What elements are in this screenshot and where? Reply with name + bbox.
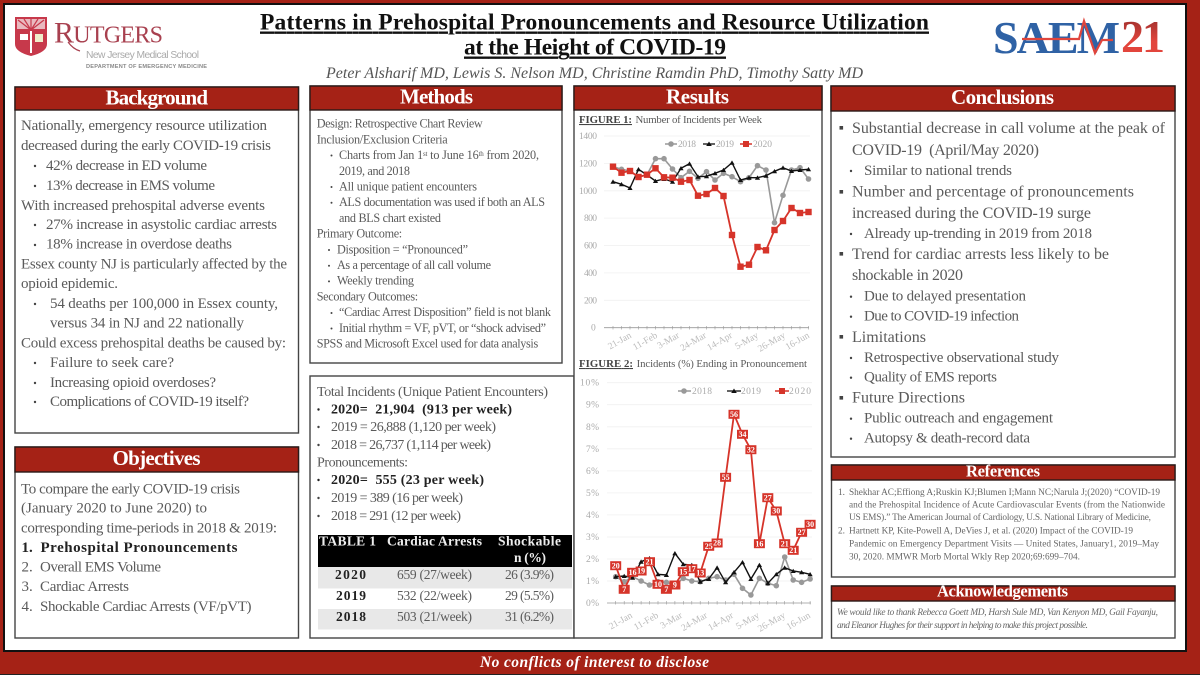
methods text: SPSS and Microsoft Excel used for data analysis [317, 336, 538, 350]
conclusions text: shockable in 2020 [852, 267, 963, 284]
methods text: 2019, and 2018 [339, 164, 410, 178]
incident totals: 2018 = 26,737 (1,114 per week) [331, 438, 491, 453]
background text: versus 34 in NJ and 22 nationally [50, 316, 244, 332]
authors: Peter Alsharif MD, Lewis S. Nelson MD, Christine Ramdin PhD, Timothy Satty MD [325, 65, 863, 82]
conclusions text: Limitations [852, 329, 926, 346]
table 1: cardiac arrests: 2019 [336, 588, 366, 603]
objectives text: 4. [22, 599, 33, 615]
conclusions text: Autopsy & death-record data [864, 431, 1030, 447]
series 2020 with data labels: 9 [673, 581, 677, 590]
table 1: cardiac arrests: 532 (22/week) [397, 588, 472, 603]
objectives text: 1. [22, 540, 33, 556]
legend: 2020 [753, 140, 772, 150]
background text: With increased prehospital adverse events [21, 198, 265, 214]
references list: Shekhar AC;Effiong A;Ruskin KJ;Blumen I;Mann NC;Narula J;(2020) “COVID-19 [849, 487, 1160, 498]
title: Patterns in Prehospital Pronouncements and Resource Utilization [260, 10, 929, 36]
incident totals: Pronouncements: [317, 456, 408, 471]
chart: percent of incidents ending in pronouncement: 24-Mar [680, 611, 710, 634]
chart: percent of incidents ending in pronouncement: 10% [580, 379, 599, 389]
background text: 42% decrease in ED volume [46, 158, 207, 174]
acknowledgements text [837, 608, 1158, 631]
methods text: Secondary Outcomes: [317, 289, 418, 303]
chart: incidents per week: 24-Mar [679, 331, 709, 354]
references list: 2. [838, 526, 845, 536]
acknowledgements text: We would like to thank Rebecca Goett MD, Harsh Sule MD, Van Kenyon MD, Gail Fayanju, [837, 608, 1158, 618]
methods text: Primary Outcome: [317, 227, 402, 241]
methods text: to June 16 [427, 148, 479, 162]
table 1: cardiac arrests: 31 (6.2%) [505, 609, 554, 624]
background text: decreased during the early COVID-19 crisis [21, 138, 271, 154]
chart: percent of incidents ending in pronouncement: 3% [586, 533, 599, 543]
chart: incidents per week: 800 [584, 214, 597, 224]
conclusions text: Similar to national trends [864, 163, 1012, 179]
series 2020 with data labels: 7 [664, 585, 668, 594]
methods text: As a percentage of all call volume [337, 258, 491, 272]
series 2020 with data labels: 15 [679, 567, 687, 576]
background text: Failure to seek care? [50, 355, 174, 371]
series 2020 with data labels: 21 [646, 557, 654, 566]
table 1: cardiac arrests: 659 (27/week) [397, 567, 472, 582]
series 2020 with data labels: 28 [713, 539, 721, 548]
legend: 2018 [692, 387, 712, 397]
chart: incidents per week: 1400 [579, 132, 597, 142]
legend: 2018 [678, 140, 696, 150]
chart: incidents per week: 11-Feb [631, 331, 660, 353]
chart: percent of incidents ending in pronouncement: 0% [586, 599, 599, 609]
chart: incidents per week: 200 [584, 296, 597, 306]
series 2020 with data labels: 21 [781, 539, 789, 548]
table 1: cardiac arrests: 2018 [336, 609, 366, 624]
legend: 2019 [741, 387, 761, 397]
chart: incidents per week: 5-May [734, 331, 761, 352]
series 2020 with data labels: 32 [747, 445, 755, 454]
panel: references [832, 462, 1175, 577]
figure 1 caption: FIGURE 1: [579, 114, 632, 126]
series 2020 with data labels: 30 [806, 520, 814, 529]
series 2018 [616, 557, 810, 595]
series 2020 with data labels: 19 [637, 567, 645, 576]
references list: US EMS).” The American Journal of Cardiology, U.S. National Library of Medicine, [849, 512, 1151, 523]
chart: incidents per week: 16-Jun [784, 331, 812, 353]
references list: 1. [838, 488, 845, 498]
heading: results: Results [666, 84, 729, 108]
panel: objectives [15, 446, 298, 638]
incident totals: Total Incidents (Unique Patient Encounters) [317, 385, 548, 400]
chart: incidents per week: 1000 [579, 187, 597, 197]
chart: percent of incidents ending in pronouncement: 21-Jan [608, 611, 635, 632]
series 2020 with data labels: 13 [696, 569, 704, 578]
series 2020 with data labels: 10 [654, 580, 662, 589]
heading: objectives: Objectives [112, 446, 200, 470]
chart: percent of incidents ending in pronouncement: 8% [586, 423, 599, 433]
chart: percent of incidents ending in pronouncement: 3-Mar [659, 611, 685, 631]
panel: methods [310, 84, 562, 363]
objectives text: 2. [22, 560, 33, 576]
references list: 30, 2020. MMWR Morb Mortal Wkly Rep 2020;69:699–704. [849, 553, 1080, 563]
title: at the Height of COVID-19 [464, 34, 726, 60]
conclusions text: Retrospective observational study [864, 350, 1060, 366]
chart: percent of incidents ending in pronouncement: 4% [586, 511, 599, 521]
background text: Could excess prehospital deaths be caused by: [21, 336, 286, 352]
series 2020 with data labels: 21 [789, 546, 797, 555]
figure 2 caption: FIGURE 2: [579, 358, 633, 370]
objectives text: To compare the early COVID-19 crisis [21, 481, 240, 497]
panel: conclusions [831, 85, 1175, 457]
panel: incident totals and table [310, 376, 574, 638]
series 2020 with data labels: 7 [622, 585, 626, 594]
background text: Increasing opioid overdoses? [50, 375, 216, 391]
methods text: Charts from Jan 1 [339, 148, 423, 162]
conclusions text: Trend for cardiac arrests less likely to be [852, 246, 1109, 263]
methods text: Disposition = “Pronounced” [337, 242, 468, 256]
table 1: cardiac arrests: Shockable [498, 534, 561, 549]
chart: percent of incidents ending in pronouncement: 5% [586, 489, 599, 499]
legend [678, 387, 811, 397]
series 2019 [613, 163, 808, 188]
logo: SAEM21: 21 [1121, 11, 1165, 62]
series 2020 with data labels: 56 [730, 410, 738, 419]
legend: 2019 [716, 140, 734, 150]
background text: Essex county NJ is particularly affected by the [21, 256, 287, 272]
table 1: cardiac arrests: 29 (5.5%) [505, 588, 554, 603]
heading: conclusions: Conclusions [951, 85, 1054, 109]
conclusions text: COVID-19 (April/May 2020) [852, 142, 1039, 159]
conclusions text: Public outreach and engagement [864, 411, 1054, 427]
table 1: cardiac arrests: 503 (21/week) [397, 609, 472, 624]
background text: opioid epidemic. [21, 276, 118, 292]
methods text: and BLS chart existed [339, 211, 441, 225]
incident totals [317, 385, 548, 524]
methods text: Design: Retrospective Chart Review [317, 117, 483, 131]
background text: 18% increase in overdose deaths [46, 236, 232, 252]
conclusions text: Future Directions [852, 390, 965, 407]
series 2020 with data labels [612, 410, 814, 594]
background text: 54 deaths per 100,000 in Essex county, [50, 296, 278, 312]
heading: acknowledgements: Acknowledgements [937, 582, 1069, 601]
objectives text: Prehospital Pronouncements [40, 540, 238, 556]
methods text: Inclusion/Exclusion Criteria [317, 132, 448, 146]
background text [21, 118, 287, 410]
heading: references: References [966, 462, 1041, 481]
chart: percent of incidents ending in pronouncement: 2% [586, 555, 599, 565]
methods text: Weekly trending [337, 274, 414, 288]
series 2020 with data labels: 55 [722, 473, 730, 482]
references list [838, 487, 1165, 563]
chart: percent of incidents ending in pronouncement: 11-Feb [632, 611, 661, 633]
background text: 13% decrease in EMS volume [46, 178, 215, 194]
methods text: ALS documentation was used if both an ALS [339, 195, 545, 209]
background text: 27% increase in asystolic cardiac arrests [46, 217, 277, 233]
incident totals: 2018 = 291 (12 per week) [331, 509, 461, 524]
acknowledgements text: and Eleanor Hughes for their support in helping to make this project possible. [837, 620, 1088, 631]
series 2020 with data labels: 30 [772, 507, 780, 516]
chart: incidents per week: 1200 [579, 159, 597, 169]
series 2020 with data labels: 27 [798, 528, 806, 537]
chart: percent of incidents ending in pronouncement: 26-May [756, 611, 788, 635]
methods text: st [423, 150, 428, 158]
heading: methods: Methods [400, 84, 473, 108]
references list: Hartnett KP, Kite-Powell A, DeVies J, et al. (2020) Impact of the COVID-19 [849, 525, 1133, 536]
table 1: cardiac arrests: 26 (3.9%) [505, 567, 554, 582]
conclusions text: increased during the COVID-19 surge [852, 205, 1091, 222]
chart: incidents per week: 3-Mar [656, 331, 682, 351]
series 2020 with data labels: 27 [764, 493, 772, 502]
logo: Rutgers New Jersey Medical School: RUTGERS [54, 16, 163, 50]
heading: background: Background [106, 85, 208, 109]
table 1: cardiac arrests: 2020 [335, 567, 366, 582]
chart: percent of incidents ending in pronouncement: 16-Jun [785, 611, 813, 633]
objectives text: (January 2020 to June 2020) to [21, 501, 207, 517]
methods text: th [478, 150, 484, 158]
table 1: cardiac arrests: n (%) [514, 550, 546, 565]
incident totals: 2019 = 389 (16 per week) [331, 491, 463, 506]
objectives text [21, 481, 277, 615]
chart: incidents per week: 21-Jan [607, 331, 634, 352]
logo: Rutgers New Jersey Medical School: DEPARTMENT OF EMERGENCY MEDICINE [86, 64, 207, 70]
chart: percent of incidents ending in pronouncement: 7% [586, 445, 599, 455]
logo: SAEM21: SAEM [993, 12, 1120, 63]
chart: percent of incidents ending in pronouncement: 14-Apr [707, 611, 736, 633]
table 1: cardiac arrests: TABLE 1 [319, 534, 376, 549]
series 2020 with data labels: 34 [738, 430, 746, 439]
series 2019 [616, 553, 810, 583]
objectives text: Overall EMS Volume [40, 560, 161, 576]
chart: incidents per week: 400 [584, 269, 597, 279]
title [260, 10, 929, 60]
chart: percent of incidents ending in pronouncement [580, 379, 814, 635]
conclusions text: Quality of EMS reports [864, 370, 997, 386]
objectives text: Cardiac Arrests [40, 579, 129, 595]
chart: incidents per week: 600 [584, 242, 597, 252]
conclusions text [840, 120, 1166, 447]
methods text [317, 117, 552, 350]
incident totals: 2020= 21,904 (913 per week) [331, 403, 512, 418]
conclusions text: Due to COVID-19 infection [864, 309, 1020, 325]
methods text: from 2020, [484, 148, 539, 162]
series 2020 with data labels: 16 [755, 539, 763, 548]
references list: Pandemic on Emergency Department Visits — United States, January1, 2019–May [849, 540, 1159, 550]
objectives text: corresponding time-periods in 2018 & 2019: [21, 520, 277, 536]
chart: incidents per week: 26-May [756, 331, 788, 355]
series 2020 with data labels: 20 [612, 561, 620, 570]
figure 1 caption: Number of Incidents per Week [633, 114, 763, 126]
chart: percent of incidents ending in pronouncement: 6% [586, 467, 599, 477]
series 2020 with data labels: 17 [688, 564, 696, 573]
chart: incidents per week: 0 [591, 324, 596, 334]
footer: no conflicts: No conflicts of interest to disclose [479, 654, 709, 671]
methods text: Initial rhythm = VF, pVT, or “shock advised” [339, 321, 546, 335]
logo: Rutgers New Jersey Medical School: New Jersey Medical School [86, 50, 199, 61]
conclusions text: Already up-trending in 2019 from 2018 [864, 226, 1092, 242]
figure 2 caption: Incidents (%) Ending in Pronouncement [634, 358, 807, 370]
references list: and the Prehospital Incidence of Acute Cardiovascular Events (from the Nationwide [849, 500, 1165, 511]
objectives text: Shockable Cardiac Arrests (VF/pVT) [40, 599, 252, 615]
chart: percent of incidents ending in pronouncement: 1% [586, 577, 599, 587]
logo: Rutgers New Jersey Medical School [15, 16, 207, 70]
incident totals: 2020= 555 (23 per week) [331, 473, 484, 488]
series 2020 [613, 167, 808, 267]
methods text: All unique patient encounters [339, 180, 477, 194]
conclusions text: Substantial decrease in call volume at the peak of [852, 120, 1166, 137]
legend: 2020 [789, 387, 811, 397]
legend [665, 140, 772, 150]
chart: incidents per week: 14-Apr [706, 331, 735, 353]
series 2020 with data labels: 25 [705, 542, 713, 551]
methods text: “Cardiac Arrest Disposition” field is not blank [339, 305, 552, 319]
series 2018 [613, 159, 808, 223]
background text: Nationally, emergency resource utilization [21, 118, 268, 134]
series 2020 with data labels: 16 [629, 568, 637, 577]
objectives text: 3. [22, 579, 33, 595]
background text: Complications of COVID-19 itself? [50, 394, 249, 410]
panel: acknowledgements [832, 582, 1175, 638]
chart: incidents per week [579, 132, 812, 355]
table 1: cardiac arrests [318, 534, 572, 630]
panel: background [15, 85, 298, 433]
conclusions text: Number and percentage of pronouncements [852, 184, 1134, 201]
panel: results [574, 84, 822, 638]
chart: percent of incidents ending in pronouncement: 9% [586, 401, 599, 411]
conclusions text: Due to delayed presentation [864, 289, 1026, 305]
table 1: cardiac arrests: Cardiac Arrests [387, 534, 482, 549]
incident totals: 2019 = 26,888 (1,120 per week) [331, 420, 496, 435]
chart: percent of incidents ending in pronouncement: 5-May [735, 611, 762, 632]
